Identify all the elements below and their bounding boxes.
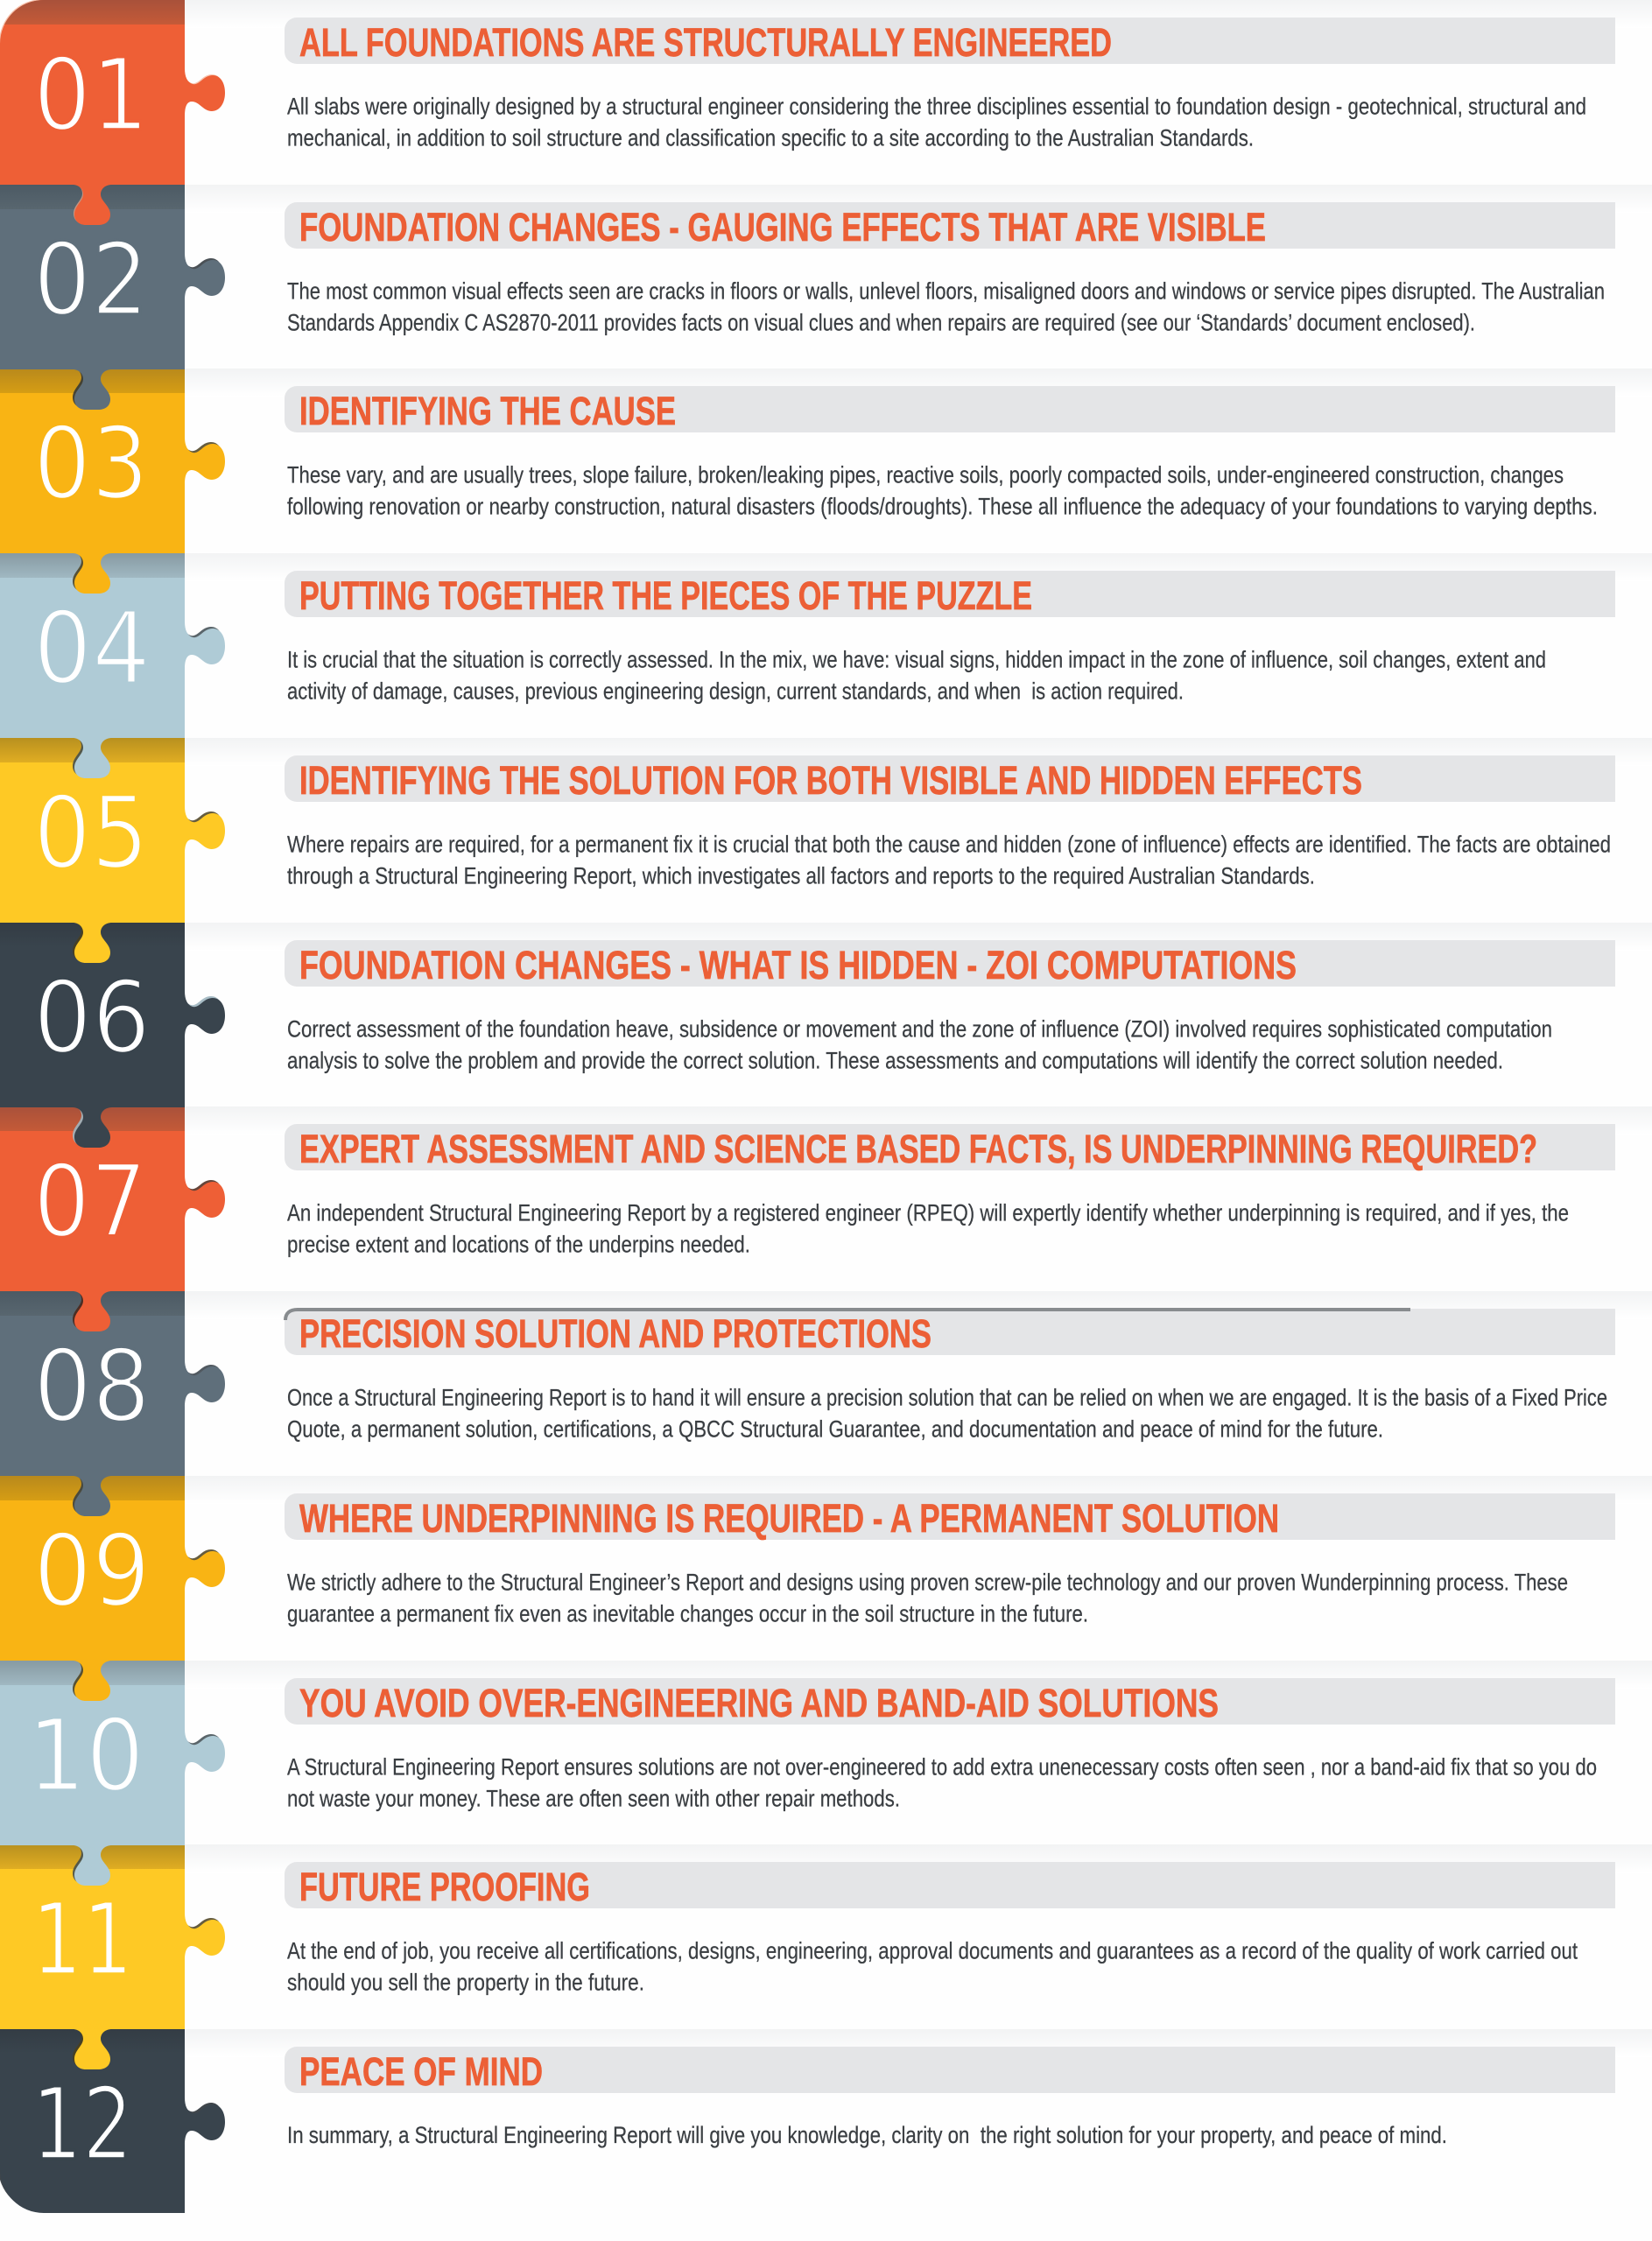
row 08 content xyxy=(185,1291,1652,1443)
row 01 content xyxy=(185,0,1652,151)
puzzle piece 10: 10 xyxy=(27,1697,144,1814)
text 04 xyxy=(287,646,1546,704)
puzzle piece 11: 11 xyxy=(32,1881,133,1998)
row 10 content xyxy=(185,1661,1652,1812)
row 06 content xyxy=(185,923,1652,1073)
text 09: guarantee a permanent fix even as inevitable changes occur in the soil structure in the future. xyxy=(287,1600,1088,1626)
row 12 content xyxy=(185,2029,1652,2148)
text 08: Quote, a permanent solution, certifications, a QBCC Structural Guarantee, and documentation and peace of mind for the future. xyxy=(287,1416,1383,1443)
text 02 xyxy=(287,278,1605,336)
puzzle piece 04: 04 xyxy=(33,590,151,706)
text 11: should you sell the property in the future. xyxy=(287,1970,644,1996)
row 04 content xyxy=(185,553,1652,704)
text 09 xyxy=(287,1569,1568,1626)
puzzle piece 05 xyxy=(0,736,225,963)
text 05 xyxy=(287,832,1611,889)
heading 10: YOU AVOID OVER-ENGINEERING AND BAND-AID SOLUTIONS xyxy=(299,1681,1219,1725)
text 01: mechanical, in addition to soil structure and classification specific to a site according to the Australian Standards. xyxy=(287,124,1254,151)
puzzle piece 12: 12 xyxy=(32,2066,133,2182)
text 07 xyxy=(287,1199,1569,1257)
heading 05: IDENTIFYING THE SOLUTION FOR BOTH VISIBLE AND HIDDEN EFFECTS xyxy=(299,758,1362,803)
text 03 xyxy=(287,462,1598,520)
puzzle piece 04 xyxy=(0,551,225,778)
row 05 content xyxy=(185,738,1652,889)
text 10: not waste your money. These are often seen with other repair methods. xyxy=(287,1786,900,1812)
puzzle piece 11 xyxy=(0,1843,225,2069)
text 12: In summary, a Structural Engineering Report will give you knowledge, clarity on the right solution for your property, and peace of mind. xyxy=(287,2122,1447,2148)
puzzle piece 05: 05 xyxy=(33,775,149,891)
heading 06: FOUNDATION CHANGES - WHAT IS HIDDEN - ZOI COMPUTATIONS xyxy=(299,943,1297,987)
puzzle piece 03 xyxy=(0,367,225,594)
puzzle piece 06 xyxy=(0,921,225,1148)
heading 09: WHERE UNDERPINNING IS REQUIRED - A PERMANENT SOLUTION xyxy=(299,1496,1279,1541)
puzzle piece 03: 03 xyxy=(33,405,149,522)
row 02 content xyxy=(185,185,1652,336)
heading 11: FUTURE PROOFING xyxy=(299,1865,590,1909)
puzzle piece 08 xyxy=(0,1289,225,1516)
puzzle piece 06: 06 xyxy=(33,959,151,1076)
heading 02: FOUNDATION CHANGES - GAUGING EFFECTS THAT ARE VISIBLE xyxy=(299,205,1266,249)
text 01 xyxy=(287,93,1586,151)
puzzle piece 01 xyxy=(0,0,225,225)
text 10 xyxy=(287,1754,1597,1812)
puzzle piece 10 xyxy=(0,1659,225,1886)
text 04: activity of damage, causes, previous engineering design, current standards, and when is action required. xyxy=(287,678,1184,704)
puzzle piece 07 xyxy=(0,1105,225,1331)
heading 04: PUTTING TOGETHER THE PIECES OF THE PUZZLE xyxy=(299,573,1032,618)
puzzle piece 01: 01 xyxy=(33,37,149,153)
text 08 xyxy=(287,1385,1607,1443)
text 11 xyxy=(287,1938,1578,1996)
text 07: precise extent and locations of the underpins needed. xyxy=(287,1231,750,1257)
puzzle piece 09: 09 xyxy=(33,1513,151,1629)
puzzle piece 08: 08 xyxy=(33,1328,151,1444)
text 05: through a Structural Engineering Report, which investigates all factors and reports to the required Australian Standards. xyxy=(287,863,1315,889)
heading 03: IDENTIFYING THE CAUSE xyxy=(299,389,676,433)
puzzle piece 07: 07 xyxy=(33,1143,147,1260)
row 11 content xyxy=(185,1844,1652,1996)
row 07 content xyxy=(185,1106,1652,1257)
puzzle column xyxy=(0,0,225,2213)
puzzle piece 12 xyxy=(0,2027,225,2213)
puzzle piece 02: 02 xyxy=(33,221,149,338)
row 03 content xyxy=(185,369,1652,520)
heading 08: PRECISION SOLUTION AND PROTECTIONS xyxy=(299,1311,931,1356)
puzzle piece 02 xyxy=(0,183,225,410)
heading 01: ALL FOUNDATIONS ARE STRUCTURALLY ENGINEERED xyxy=(299,20,1112,65)
text 06 xyxy=(287,1015,1552,1073)
puzzle piece 09 xyxy=(0,1474,225,1701)
row 09 content xyxy=(185,1476,1652,1626)
heading 12: PEACE OF MIND xyxy=(299,2049,543,2094)
